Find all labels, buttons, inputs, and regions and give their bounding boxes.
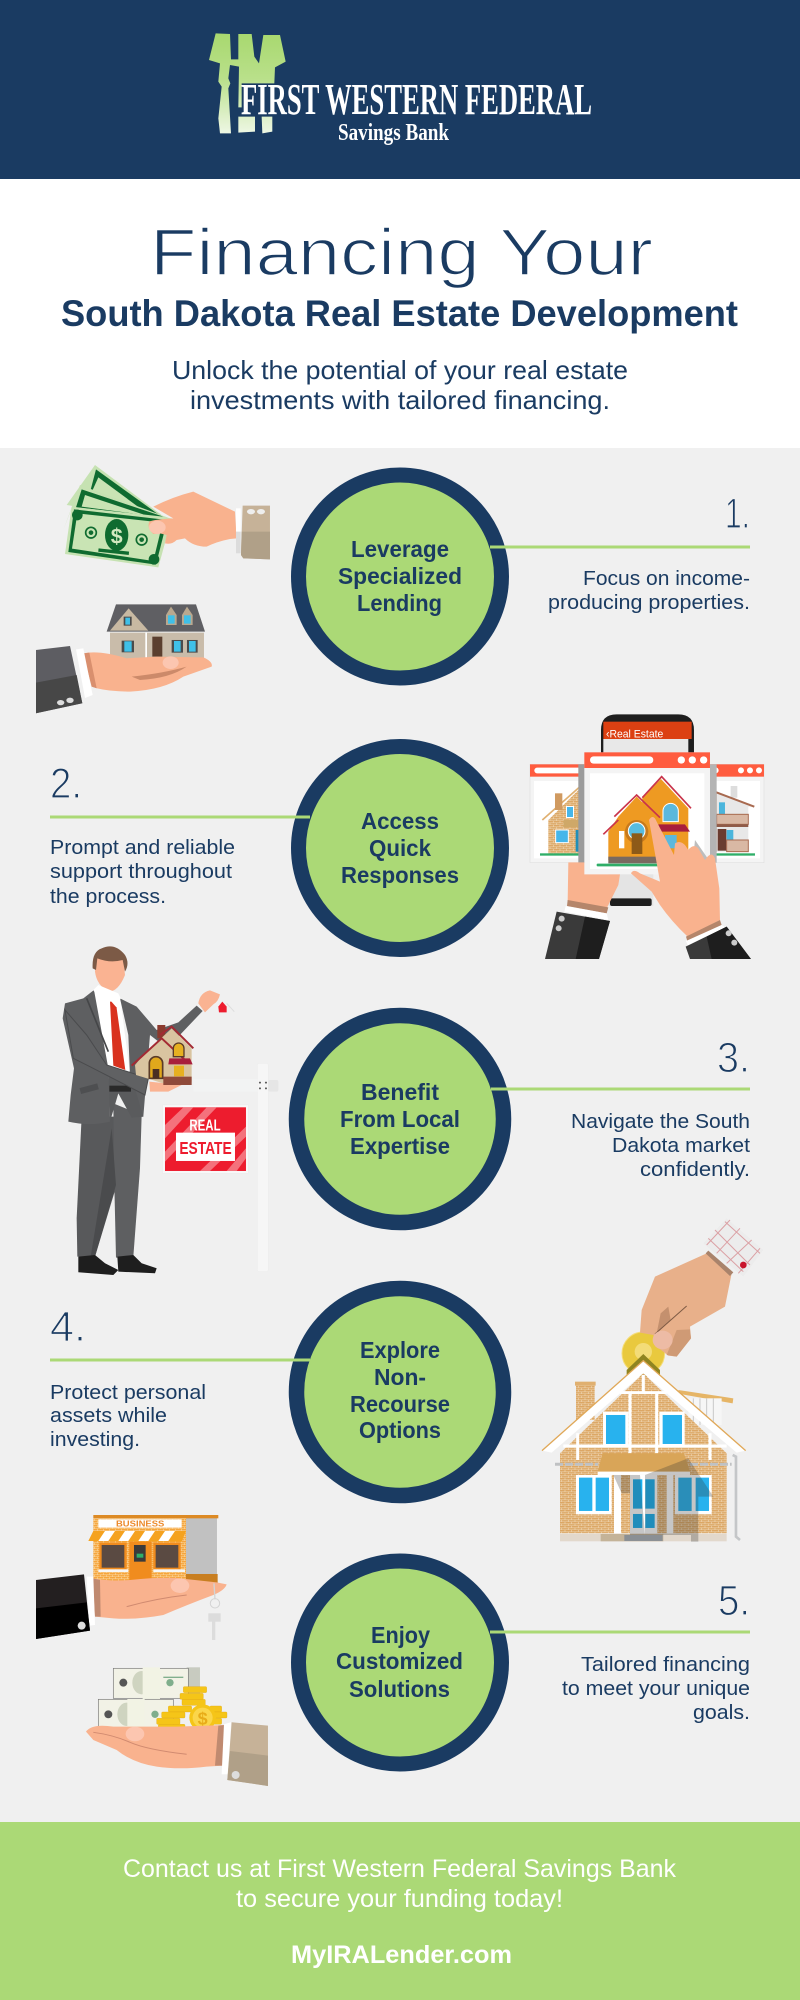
heading: Options — [359, 1417, 441, 1443]
illustration: real estate agent with sign: REAL — [189, 1118, 221, 1135]
panel: title block — [0, 179, 800, 448]
connector line — [490, 546, 750, 548]
description — [562, 1653, 750, 1724]
connector line — [490, 1630, 750, 1634]
description: Protect personal — [50, 1381, 206, 1404]
description: Tailored financing — [581, 1653, 750, 1676]
step 5 — [298, 1561, 750, 1764]
heading — [350, 1337, 450, 1443]
heading — [340, 1079, 460, 1159]
illustration: hands holding shop and cash — [36, 1515, 268, 1786]
heading: Lending — [357, 590, 442, 616]
circle: step 1 — [298, 475, 502, 678]
title: Financing Your — [150, 215, 653, 289]
description: Navigate the South — [571, 1110, 750, 1133]
subtitle: South Dakota Real Estate Development — [61, 293, 738, 334]
heading — [341, 808, 459, 888]
heading — [338, 536, 462, 616]
heading: Specialized — [338, 563, 462, 589]
illustration: real estate agent with sign: ESTATE — [179, 1138, 232, 1158]
description: the process. — [50, 885, 166, 908]
heading: Non- — [374, 1364, 426, 1390]
description: confidently. — [640, 1158, 750, 1181]
number: 3. — [717, 1034, 750, 1082]
circle: step 4 — [296, 1288, 504, 1496]
heading: Explore — [360, 1337, 440, 1363]
illustration: hands holding shop and cash: $ — [198, 1708, 208, 1728]
panel: header banner — [0, 0, 800, 179]
illustration: hands exchanging money and house: $ — [111, 524, 123, 548]
description: investing. — [50, 1428, 140, 1451]
footer message: to secure your funding today! — [236, 1885, 563, 1913]
heading: Responses — [341, 862, 459, 888]
connector line — [50, 1358, 310, 1362]
heading: Customized — [336, 1648, 463, 1674]
footer message: Contact us at First Western Federal Savings Bank — [123, 1855, 676, 1883]
circle: step 3 — [296, 1016, 504, 1222]
illustration: hands using phone with house listings — [530, 714, 764, 959]
description — [50, 836, 235, 908]
illustration: hands holding shop and cash: BUSINESS — [116, 1519, 165, 1529]
illustration: hand dropping coin into brick house — [542, 1218, 763, 1542]
description: to meet your unique — [562, 1677, 750, 1700]
step 3 — [296, 1016, 750, 1222]
logo wordmark: Savings Bank — [338, 120, 450, 146]
footer website: MyIRALender.com — [291, 1941, 512, 1969]
number: 5. — [718, 1577, 750, 1625]
step 1 — [298, 475, 750, 678]
description: assets while — [50, 1404, 167, 1427]
heading: Recourse — [350, 1391, 450, 1417]
description — [571, 1110, 750, 1181]
heading: Leverage — [351, 536, 449, 562]
illustration: hands using phone with house listings: ‹Real Estate — [606, 728, 663, 740]
step 2 — [50, 746, 502, 950]
circle: step 2 — [298, 746, 502, 950]
description: producing properties. — [548, 591, 750, 614]
description: Dakota market — [612, 1134, 750, 1157]
heading: Expertise — [350, 1133, 450, 1159]
heading: Access — [361, 808, 439, 834]
description: support throughout — [50, 860, 232, 883]
description: goals. — [693, 1701, 750, 1724]
illustration: hands exchanging money and house — [36, 465, 270, 713]
step 4 — [50, 1288, 504, 1496]
intro text: Unlock the potential of your real estate — [172, 355, 628, 385]
number: 2. — [50, 760, 82, 808]
heading: Quick — [369, 835, 432, 861]
connector line — [491, 1088, 750, 1090]
heading: Solutions — [349, 1676, 450, 1702]
description — [548, 567, 750, 614]
circle: step 5 — [298, 1561, 502, 1764]
number: 1. — [725, 490, 750, 538]
connector line — [50, 816, 310, 818]
logo icon — [209, 33, 286, 133]
heading — [336, 1622, 463, 1702]
description: Prompt and reliable — [50, 836, 235, 859]
heading: From Local — [340, 1106, 460, 1132]
illustration: real estate agent with sign — [63, 946, 278, 1275]
intro text: investments with tailored financing. — [190, 385, 610, 415]
footer message — [123, 1855, 676, 1913]
description — [50, 1381, 206, 1451]
heading: Benefit — [361, 1079, 439, 1105]
logo wordmark — [241, 75, 592, 146]
intro text — [172, 355, 628, 415]
description: Focus on income- — [583, 567, 750, 590]
panel: footer call to action — [0, 1822, 800, 2000]
heading: Enjoy — [371, 1622, 430, 1648]
number: 4. — [50, 1303, 86, 1351]
